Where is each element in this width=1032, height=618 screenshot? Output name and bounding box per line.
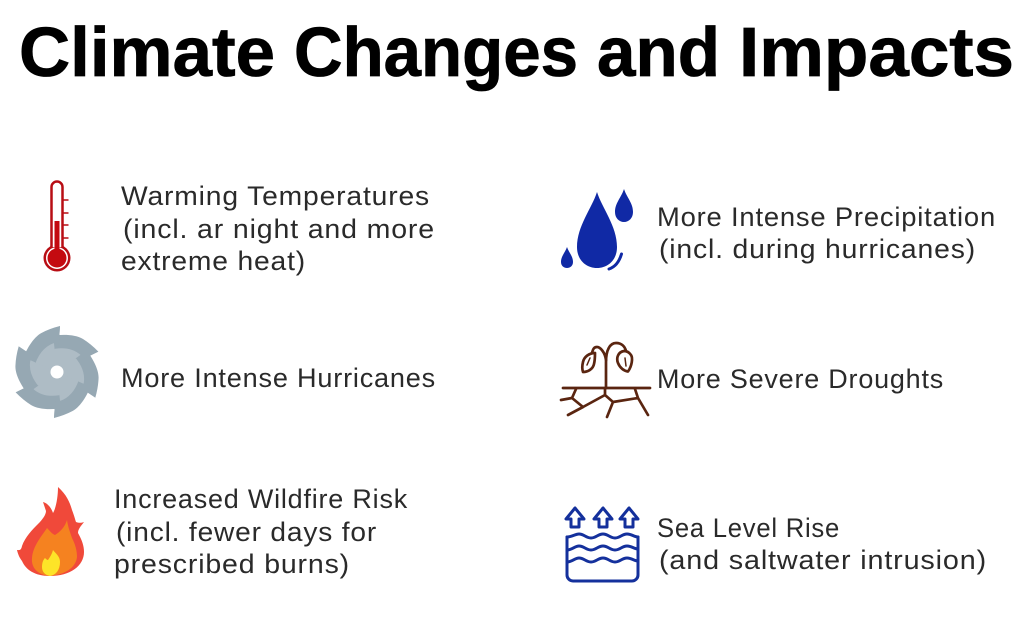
text: increased wildfire risk: Increased Wildfire Risk <box>114 484 408 514</box>
icon: flame <box>17 487 84 576</box>
text: increased wildfire risk <box>114 484 408 579</box>
title: Impacts <box>739 13 1014 91</box>
text: sea level rise <box>657 513 987 575</box>
title: and <box>597 13 720 91</box>
text: more severe droughts: More Severe Droughts <box>657 364 944 394</box>
text: warming temperatures <box>121 181 435 276</box>
text: sea level rise: (and saltwater intrusion) <box>659 545 987 575</box>
text: more intense precipitation: (incl. during hurricanes) <box>659 234 976 264</box>
text: sea level rise: Sea Level Rise <box>657 513 840 543</box>
text: more intense precipitation <box>657 202 996 264</box>
text: warming temperatures: (incl. ar night and more <box>123 214 435 244</box>
text: more intense hurricanes: More Intense Hurricanes <box>121 363 436 393</box>
icon: thermometer <box>44 182 70 272</box>
title: Climate <box>19 13 275 91</box>
text: increased wildfire risk: prescribed burns) <box>114 549 350 579</box>
title <box>19 13 1014 91</box>
text: more intense precipitation: More Intense Precipitation <box>657 202 996 232</box>
text: warming temperatures: extreme heat) <box>121 246 306 276</box>
icon: withered plant and cracked soil <box>561 343 650 417</box>
title: Changes <box>294 13 578 91</box>
icon: sea level rise <box>566 508 638 581</box>
text: warming temperatures: Warming Temperatures <box>121 181 430 211</box>
icon: hurricane <box>0 313 117 431</box>
text: increased wildfire risk: (incl. fewer days for <box>116 517 377 547</box>
icon: water drops <box>561 189 633 269</box>
